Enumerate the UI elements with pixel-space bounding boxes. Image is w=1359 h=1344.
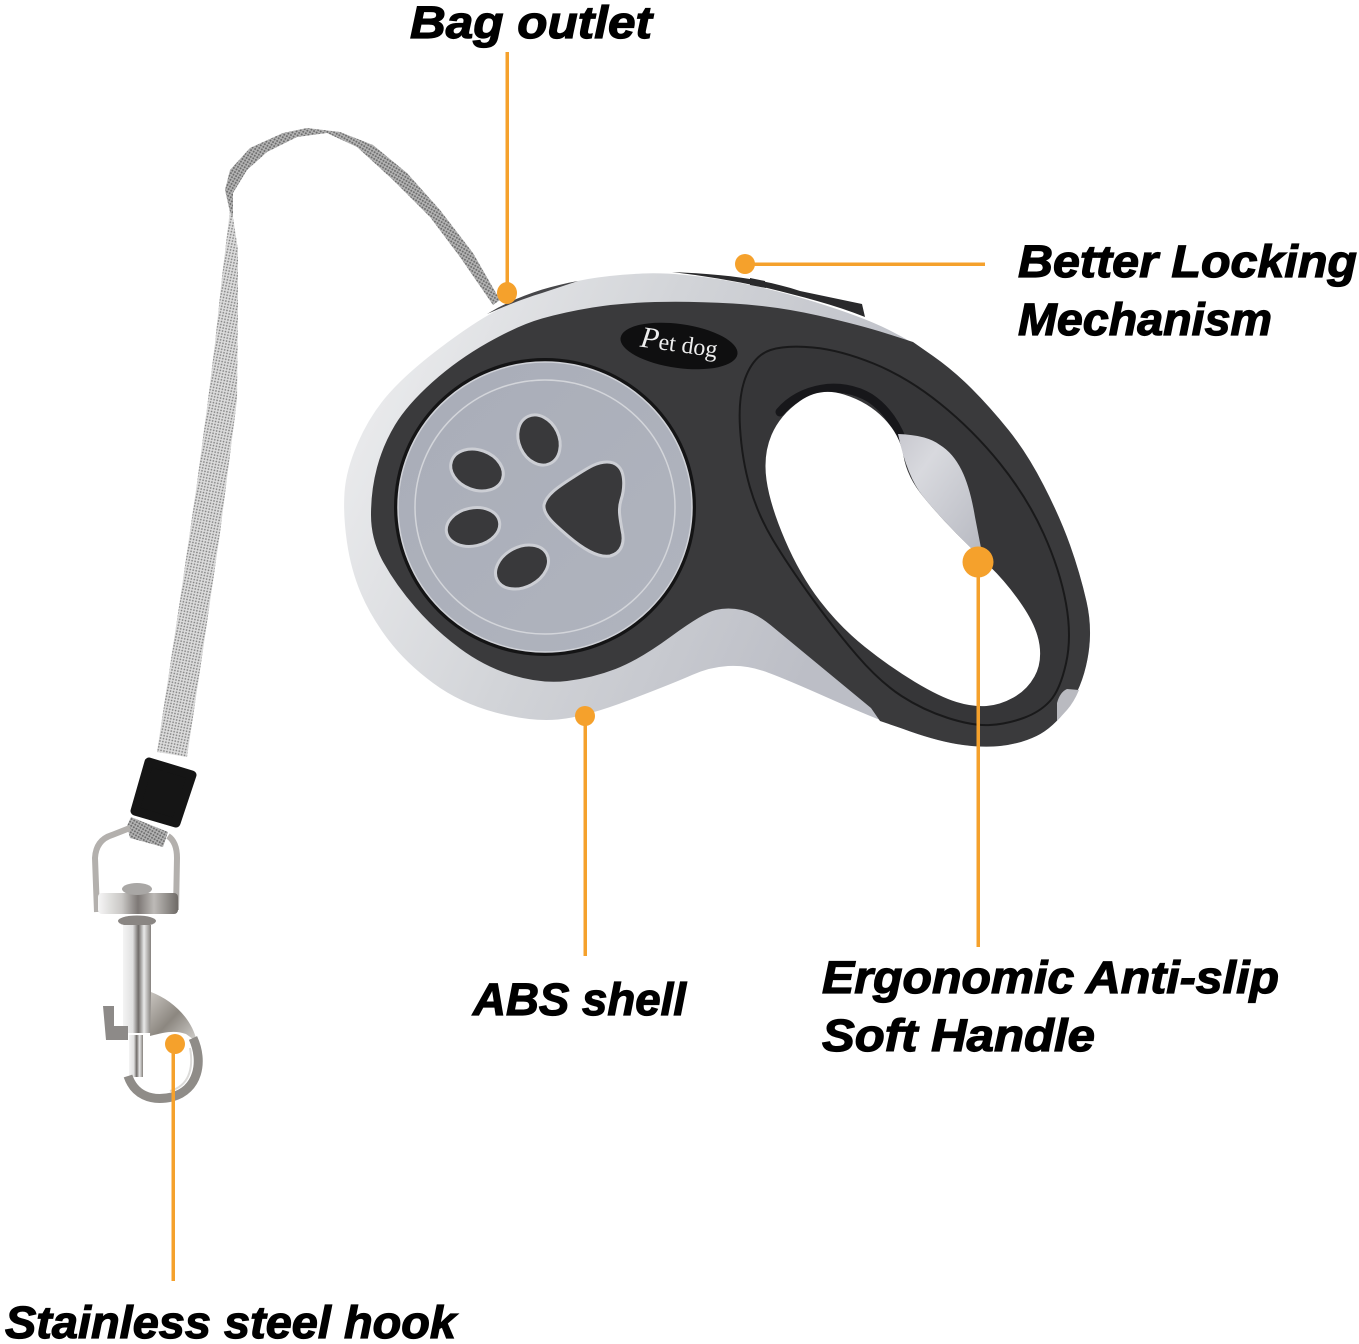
grip accent — [898, 434, 981, 550]
dark front panel — [371, 302, 1090, 747]
dot: ABS shell — [575, 706, 595, 726]
leash stopper — [135, 762, 192, 823]
dot: locking mechanism — [735, 254, 755, 274]
dot: steel hook — [165, 1034, 185, 1054]
handle recess — [740, 347, 1069, 725]
logo text: Pet dog — [638, 321, 720, 364]
label: better locking mechanism: Mechanism — [1018, 294, 1272, 345]
steel hook — [95, 817, 198, 1098]
handle opening — [765, 392, 1040, 706]
callout line: bag outlet — [497, 52, 517, 304]
light tip on handle base — [1057, 689, 1079, 721]
callout line: soft handle — [962, 546, 994, 947]
callout line: locking mechanism — [735, 254, 985, 274]
logo badge — [618, 316, 740, 376]
label: better locking mechanism: Better Locking — [1018, 236, 1357, 287]
label: ergonomic anti-slip soft handle: Soft Handle — [822, 1010, 1095, 1061]
label: ergonomic anti-slip soft handle: Ergonomic Anti-slip — [822, 952, 1279, 1003]
callout line: ABS shell — [575, 706, 595, 956]
dot: soft handle — [962, 546, 994, 578]
paw print — [443, 408, 624, 598]
handle shadow above opening — [780, 388, 902, 440]
dot: bag outlet — [497, 282, 517, 304]
callout line: steel hook — [165, 1034, 185, 1281]
label: better locking mechanism — [1018, 236, 1357, 345]
top dark lips: bag outlet and lock button — [487, 272, 865, 317]
leash strap — [157, 128, 500, 757]
leash handle body shell — [344, 273, 1090, 747]
label: ergonomic anti-slip soft handle — [822, 952, 1279, 1061]
label: ABS shell: ABS shell — [472, 974, 688, 1025]
paw disc — [394, 358, 696, 656]
